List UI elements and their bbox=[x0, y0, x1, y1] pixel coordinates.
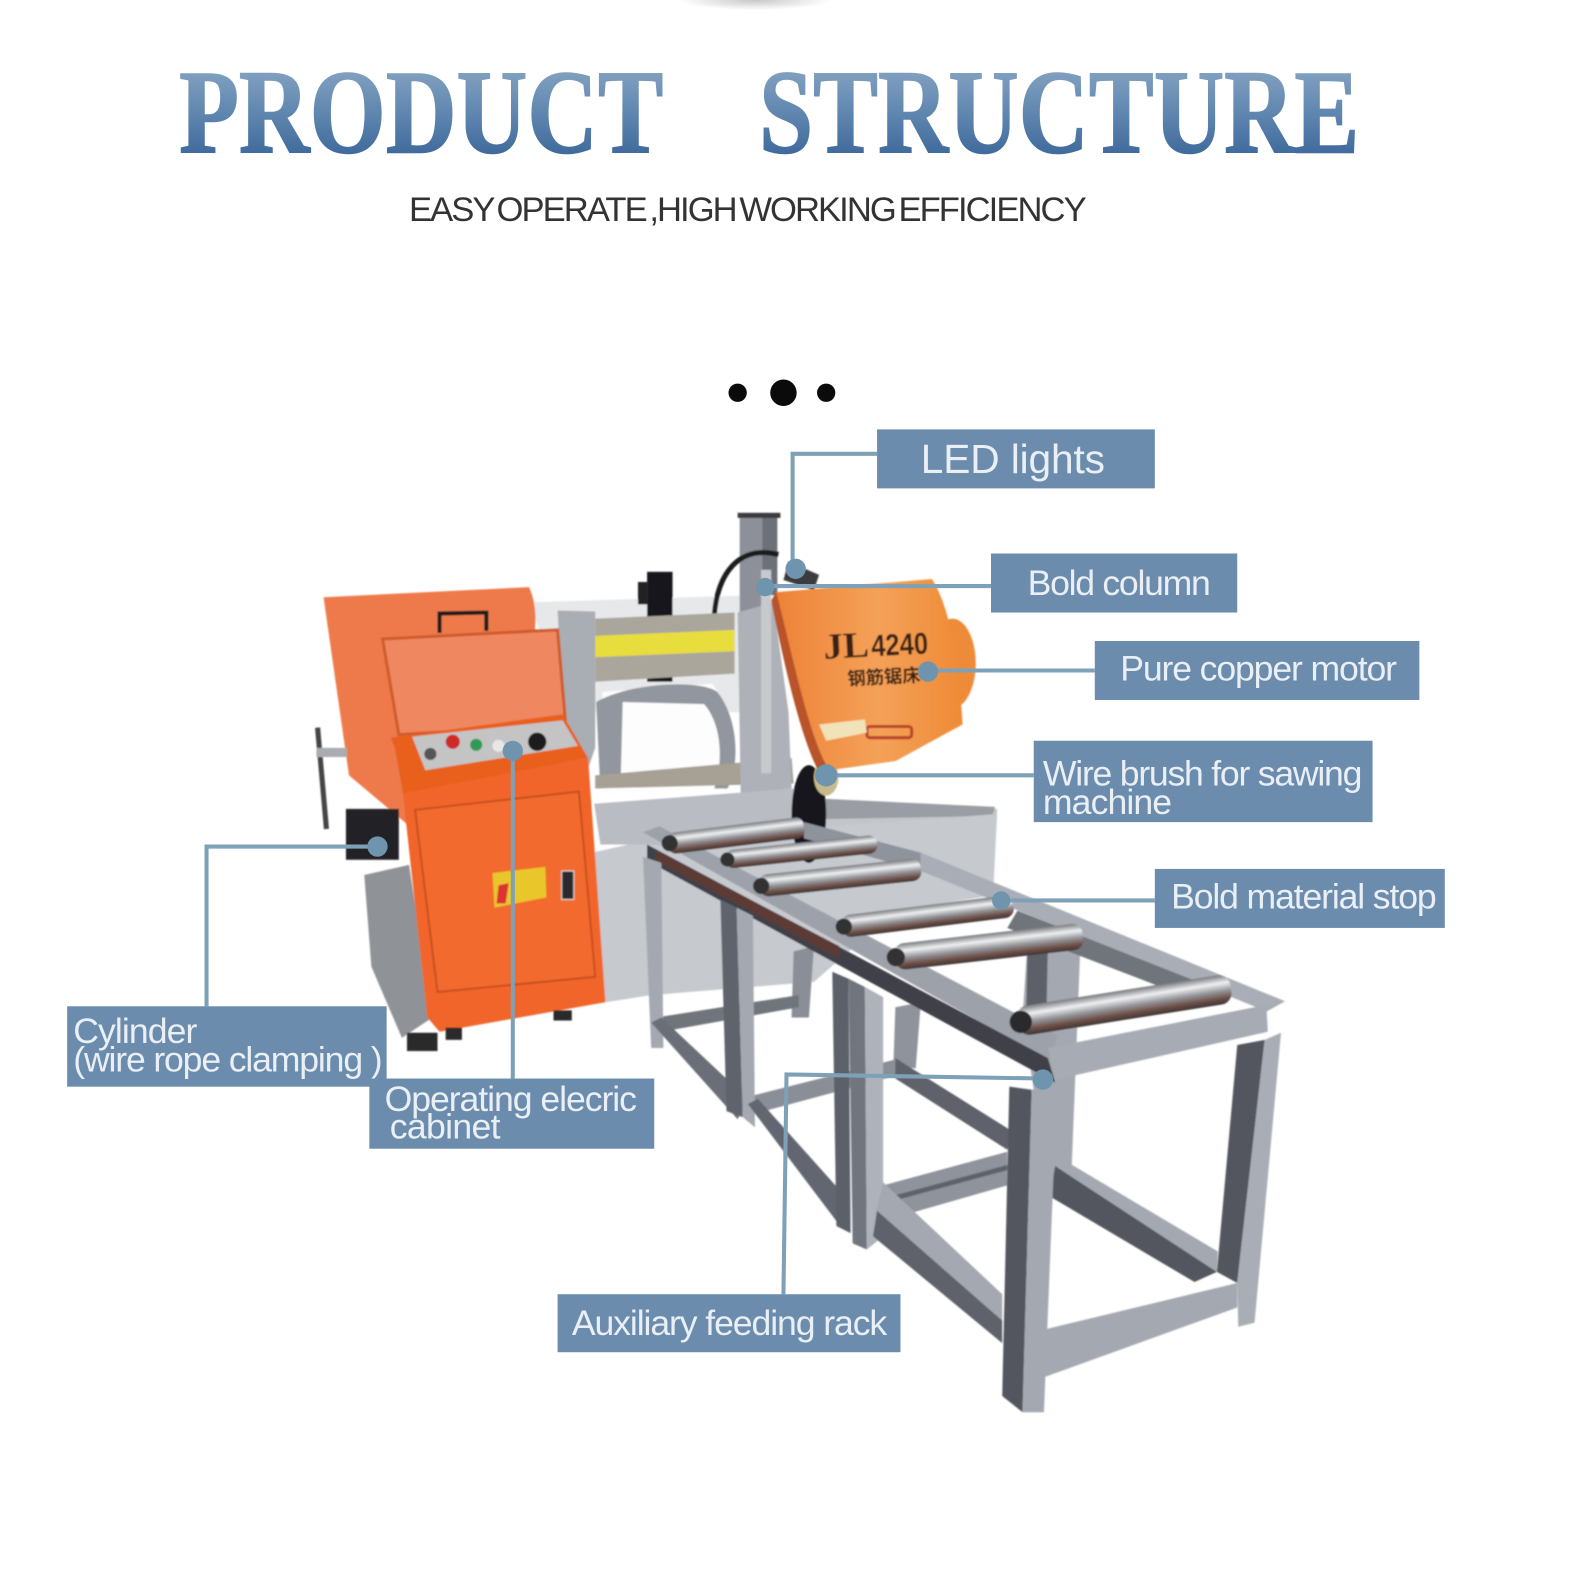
callout: operating electric cabinet: Operating elecric bbox=[385, 1079, 637, 1119]
callout: operating electric cabinet bbox=[369, 741, 654, 1149]
rear rack legs and rails bbox=[656, 941, 1218, 1282]
rear tray and saw body bbox=[529, 595, 997, 1002]
right guide plate bbox=[738, 602, 792, 794]
carousel dots bbox=[729, 380, 835, 406]
saw blade guard: 钢筋锯床 bbox=[847, 664, 921, 689]
roller 3 bbox=[752, 858, 922, 898]
subtitle: EASY OPERATE ,HIGH WORKING EFFICIENCY bbox=[409, 191, 1087, 229]
callout: cylinder: Cylinder bbox=[73, 1011, 198, 1051]
cabinet body bbox=[403, 758, 605, 1032]
callout: pure copper motor bbox=[918, 641, 1419, 700]
callout: operating electric cabinet: cabinet bbox=[390, 1107, 501, 1147]
side motor and handle bbox=[315, 727, 432, 1038]
callout: bold column bbox=[756, 554, 1237, 613]
saw blade guard: JL bbox=[822, 624, 870, 667]
roller 6 bbox=[1007, 974, 1233, 1038]
callout: bold column: Bold column bbox=[1028, 563, 1211, 603]
roller 4 bbox=[834, 895, 1015, 939]
rack top frame bbox=[643, 822, 1285, 1083]
cabinet lid bbox=[383, 630, 566, 735]
lid handle bbox=[440, 613, 486, 633]
title: PRODUCT bbox=[179, 46, 663, 179]
callout: wire brush: Wire brush for sawing bbox=[1043, 753, 1362, 793]
title: STRUCTURE bbox=[759, 46, 1359, 179]
roller 5 bbox=[885, 923, 1084, 971]
front rack legs and rails bbox=[643, 857, 1281, 1412]
cabinet door bbox=[415, 792, 595, 992]
callout: cylinder bbox=[67, 836, 388, 1087]
saw base bbox=[594, 789, 809, 847]
callout: LED lights: LED lights bbox=[921, 436, 1105, 482]
warning label bbox=[492, 867, 546, 908]
roller 1 bbox=[660, 817, 805, 855]
feet bbox=[407, 1010, 572, 1051]
callout: bold material stop bbox=[992, 869, 1445, 928]
rear hood bbox=[324, 587, 570, 824]
saw blade guard bbox=[771, 579, 976, 770]
saw blade guard: 4240 bbox=[870, 626, 929, 663]
machine illustration bbox=[315, 513, 1285, 1412]
left guide plate bbox=[558, 610, 595, 804]
callout: pure copper motor: Pure copper motor bbox=[1120, 649, 1397, 689]
wire brush wheel bbox=[792, 759, 838, 863]
column and hydraulic bbox=[638, 513, 819, 682]
title bbox=[179, 46, 1359, 179]
callout: cylinder: (wire rope clamping ) bbox=[73, 1039, 383, 1079]
callout: wire brush: machine bbox=[1043, 782, 1172, 822]
control panel bbox=[412, 720, 578, 770]
callout: auxiliary feeding rack bbox=[558, 1069, 1053, 1352]
door handle bbox=[562, 871, 574, 899]
callout: auxiliary feeding rack: Auxiliary feeding rack bbox=[572, 1303, 887, 1343]
top shadow bbox=[679, 0, 831, 10]
callout: bold material stop: Bold material stop bbox=[1171, 877, 1437, 917]
callout: LED lights bbox=[785, 429, 1155, 579]
callout: wire brush bbox=[815, 741, 1373, 822]
roller 2 bbox=[719, 835, 878, 869]
beam with ruler bbox=[595, 613, 735, 682]
bow frame bbox=[595, 684, 794, 794]
